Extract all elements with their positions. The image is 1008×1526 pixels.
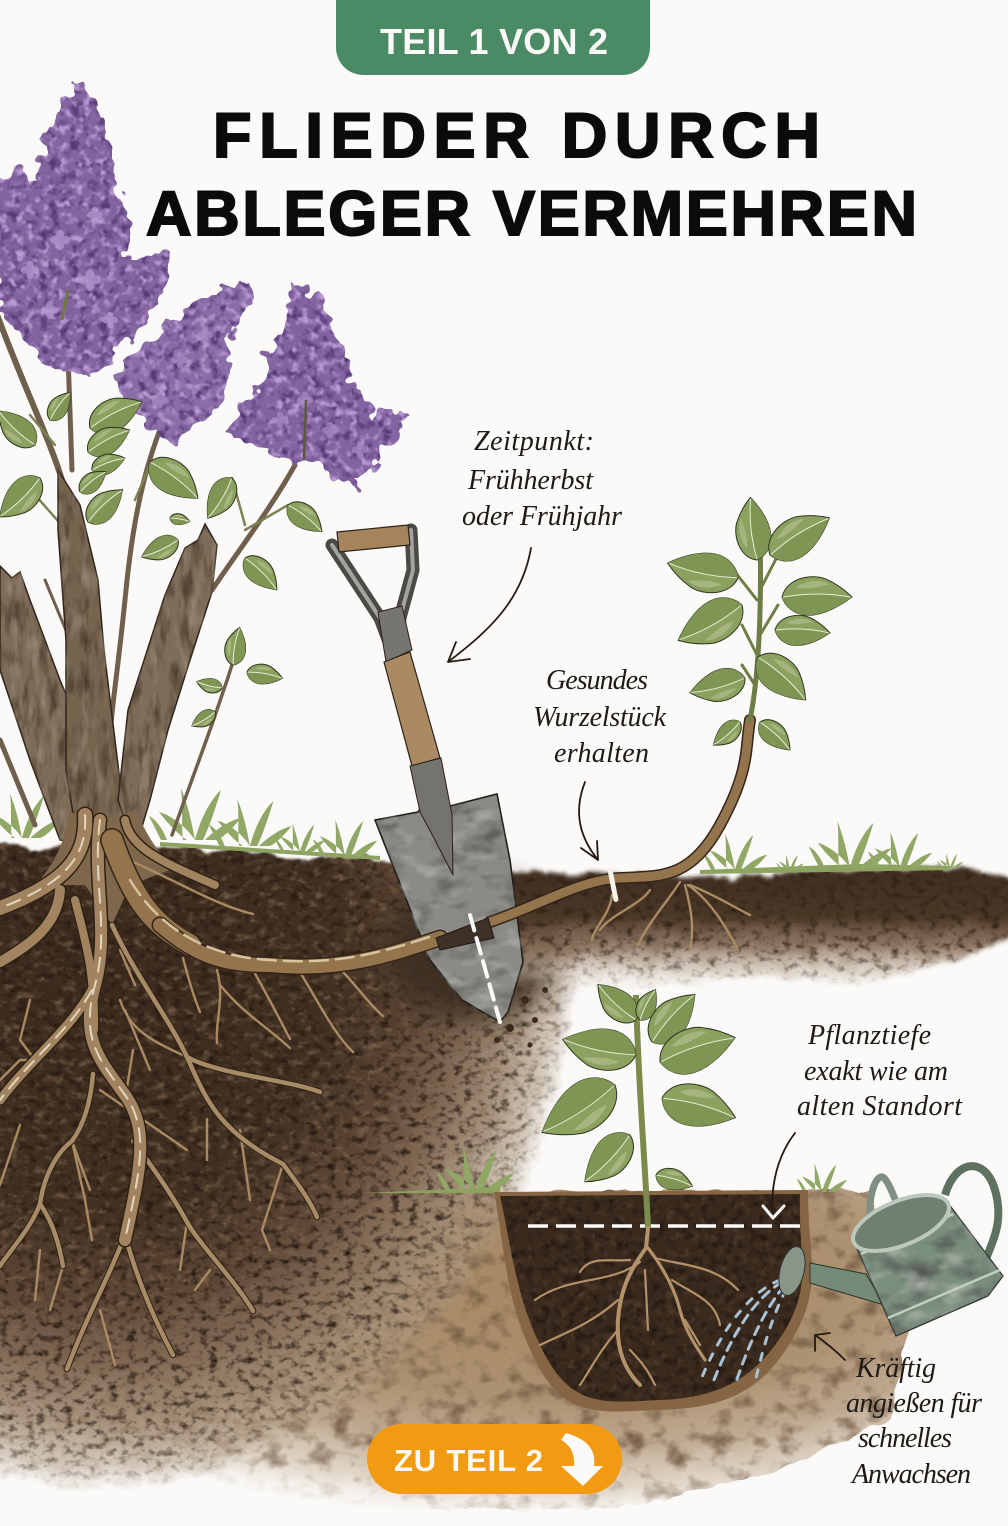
blossom: middle cluster xyxy=(118,280,252,444)
hole: dark soil fill xyxy=(500,1194,802,1402)
arrow: watering xyxy=(815,1333,845,1360)
root system of the mother shrub xyxy=(0,815,383,1369)
can: body xyxy=(854,1203,1003,1336)
cut dashed line xyxy=(470,915,500,1022)
transplanted stem xyxy=(636,995,648,1228)
transplanted plant leaves xyxy=(530,975,741,1196)
soil crumbs by the spade xyxy=(487,987,548,1048)
callout: healthy root: Gesundes xyxy=(546,665,648,696)
callout: timing: oder Frühjahr xyxy=(462,501,622,532)
callout: watering: Anwachsen xyxy=(850,1459,971,1490)
sucker leaves xyxy=(663,496,852,758)
spade: wooden grip xyxy=(337,525,410,552)
spade: blade xyxy=(375,785,523,1022)
spade: D-grip metal xyxy=(332,530,413,650)
trunk flare into roots xyxy=(35,808,175,925)
callout: planting depth: Pflanztiefe xyxy=(807,1020,931,1051)
root from mother plant to sucker xyxy=(112,840,190,945)
transplanted roots xyxy=(535,1228,738,1385)
thick roots: dark outline xyxy=(0,815,215,1240)
fine roots xyxy=(0,862,383,1365)
soil: right-hand strip xyxy=(470,868,1008,1060)
callout: healthy root: Wurzelstück xyxy=(533,702,667,733)
icon: curved arrow xyxy=(561,1433,603,1486)
can: bands xyxy=(861,1214,1000,1318)
planting depth dashed line xyxy=(528,1224,800,1228)
callout: healthy root: erhalten xyxy=(554,738,649,769)
thin branches xyxy=(0,312,295,835)
arrow: planting depth xyxy=(772,1133,795,1216)
callout: timing: Frühherbst xyxy=(467,465,594,496)
planting hole xyxy=(494,995,812,1411)
spade: socket and ridge xyxy=(410,758,453,875)
shrub leaves xyxy=(0,387,330,733)
callout: planting depth xyxy=(797,1020,963,1122)
soil clump on cut xyxy=(436,918,494,950)
can: spout xyxy=(810,1263,884,1305)
sucker roots xyxy=(592,882,750,950)
trunk: centre xyxy=(58,470,128,850)
soil: dark patch around the spade tip xyxy=(385,880,555,1020)
callout: planting depth: exakt wie am xyxy=(804,1056,948,1087)
callout: timing xyxy=(462,426,622,532)
callout: watering: schnelles xyxy=(858,1423,952,1454)
can: rear handle xyxy=(945,1166,998,1262)
soil cross-section xyxy=(0,842,1008,1510)
medium roots: dark outline xyxy=(0,925,320,1369)
sucker stem xyxy=(750,530,761,720)
title: FLIEDER DURCH xyxy=(213,101,820,171)
callout arrows xyxy=(448,548,845,1360)
hole: outer rim xyxy=(494,1190,812,1411)
shrub trunks and branches xyxy=(0,312,295,925)
soil: main dark mass under the shrub xyxy=(0,843,640,1510)
watering can xyxy=(774,1166,1003,1336)
soil: tan ground around planting hole xyxy=(60,1190,915,1510)
arrow: season to spade xyxy=(448,548,531,662)
callout: watering xyxy=(846,1353,982,1490)
thick roots: highlight xyxy=(0,815,140,1240)
grass tufts xyxy=(0,788,963,1193)
callout: healthy root xyxy=(533,665,667,769)
button: to part 2 xyxy=(367,1424,622,1494)
thick roots: fill xyxy=(0,815,215,1240)
medium roots: fill xyxy=(0,925,320,1369)
arrow: root section xyxy=(579,782,598,860)
spade: wooden shaft xyxy=(384,652,440,766)
thin grass line on the soil surface xyxy=(160,842,950,874)
can: rim xyxy=(845,1183,957,1263)
callout: watering: Kräftig xyxy=(855,1353,936,1384)
callout: timing: Zeitpunkt: xyxy=(474,426,594,457)
callout: watering: angießen für xyxy=(846,1388,982,1419)
title xyxy=(146,101,917,249)
can: front handle xyxy=(870,1177,900,1222)
severed root and sucker plant xyxy=(112,530,778,1022)
title: ABLEGER VERMEHREN xyxy=(146,179,917,249)
blossom: right cluster xyxy=(226,284,408,488)
callout: planting depth: alten Standort xyxy=(797,1091,963,1122)
water stream xyxy=(700,1280,786,1385)
can: sprinkler head xyxy=(774,1244,810,1298)
spade: metal collar xyxy=(378,606,412,662)
button: to part 2: ZU TEIL 2 xyxy=(394,1443,543,1478)
blossom: large left cluster xyxy=(0,76,168,378)
top badge xyxy=(336,0,650,75)
top badge: TEIL 1 VON 2 xyxy=(380,21,608,62)
lilac blossom clusters xyxy=(0,76,408,488)
trunk: right broken trunk xyxy=(118,524,217,850)
trunk: far left broken trunk xyxy=(0,566,112,850)
spade xyxy=(332,525,523,1022)
cut mark on root xyxy=(610,870,616,900)
